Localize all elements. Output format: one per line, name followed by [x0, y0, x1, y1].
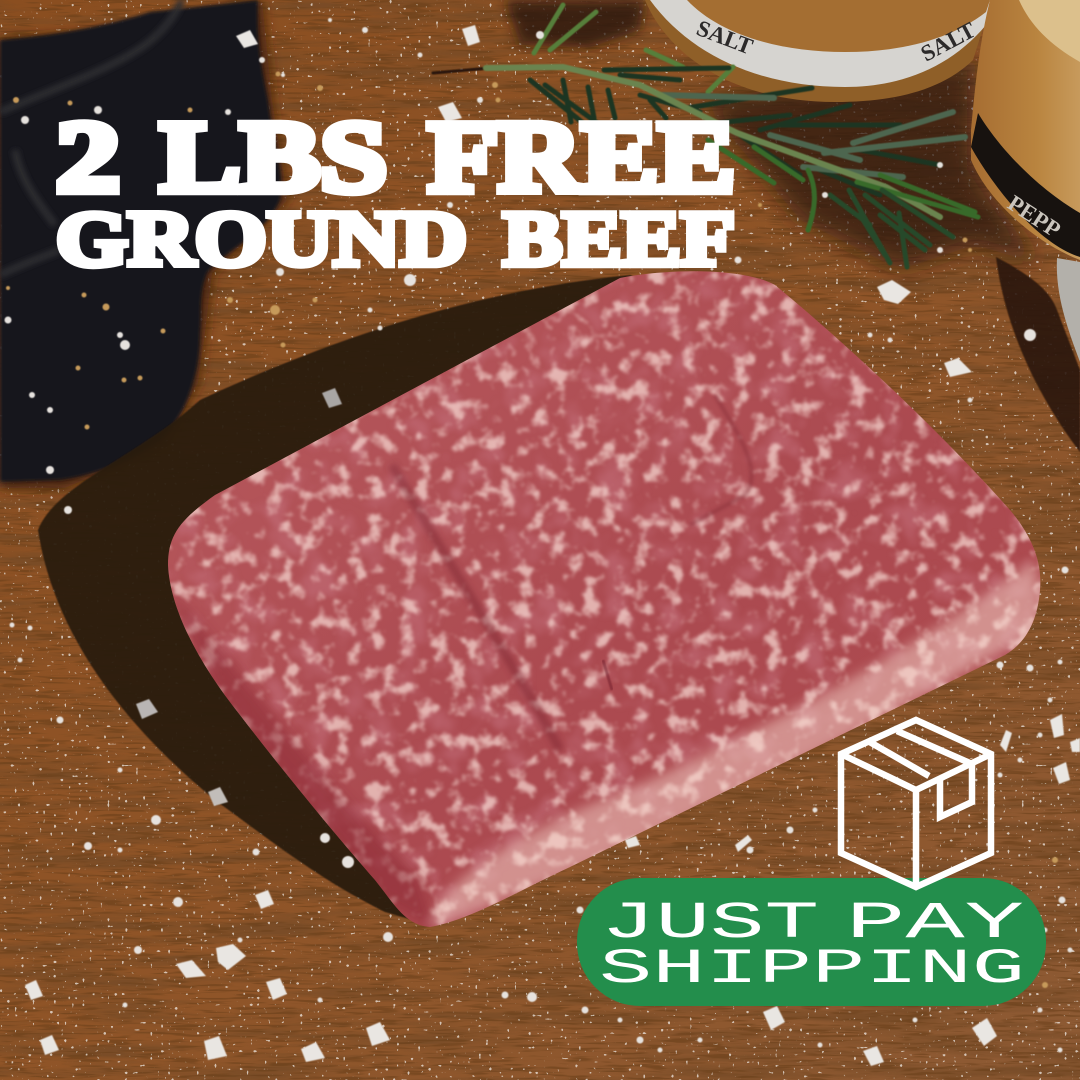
badge: just pay shipping [577, 878, 1046, 1006]
pepper jar [971, 0, 1080, 260]
press creases [392, 465, 560, 750]
darker left front edge [168, 590, 435, 930]
badge line 2: SHIPPING [599, 941, 1025, 997]
ground beef patty [160, 260, 1050, 940]
badge line 1: JUST [601, 894, 819, 953]
salt jar: SALT [693, 15, 756, 59]
headline word: LBS: LBS [160, 101, 387, 214]
pepper jar: PEPP [1003, 190, 1065, 243]
salt jar [645, 0, 990, 102]
pale fatty front edge [430, 560, 1045, 927]
headline [56, 101, 735, 282]
headline word: BEEF: BEEF [503, 195, 735, 282]
shadows of jars and rosemary [505, 0, 1080, 452]
icon: shipping box [841, 720, 991, 887]
salt jar: SALT [917, 17, 980, 66]
headline word: GROUND: GROUND [56, 195, 467, 282]
knife edge [1057, 258, 1080, 362]
shadow of the beef on the board [38, 275, 700, 925]
black cloth [0, 0, 288, 488]
badge line 1 [601, 894, 1024, 953]
rosemary sprig [433, 5, 978, 267]
headline word: 2: 2 [56, 101, 120, 214]
badge line 1: PAY [846, 894, 1024, 953]
headline word: FREE: FREE [428, 101, 735, 214]
